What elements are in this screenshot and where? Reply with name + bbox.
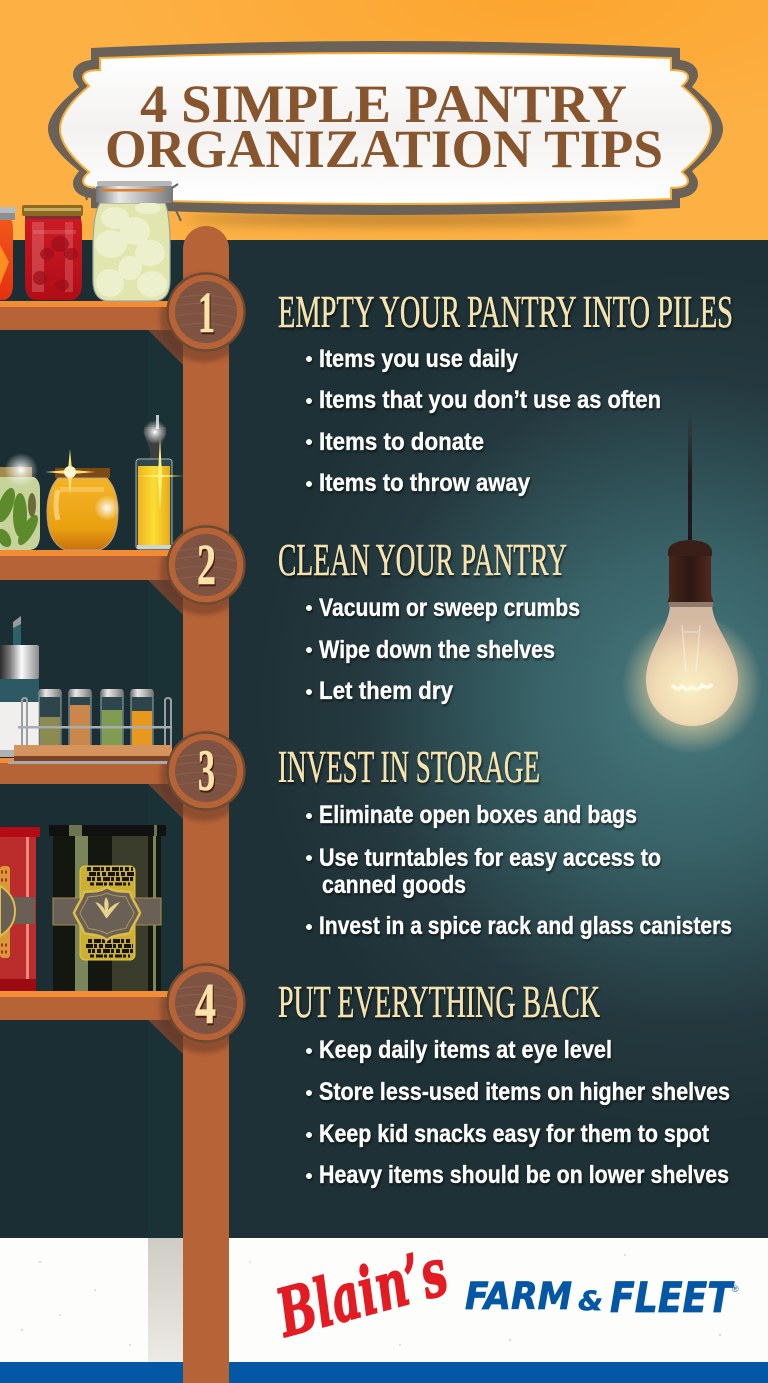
wooden post — [183, 226, 229, 1383]
back wall corner strip — [148, 240, 183, 1238]
shelf 3 — [0, 758, 183, 819]
footer speckle texture — [21, 1254, 721, 1346]
shelf 2 — [0, 550, 183, 615]
number badge 3: 3 — [198, 738, 215, 803]
tip 4 bullets: Keep daily items at eye level — [319, 1036, 612, 1064]
tin: black tea — [49, 825, 166, 991]
tip 2 bullets: Vacuum or sweep crumbs — [319, 594, 580, 622]
tip 2 — [278, 535, 580, 705]
sign outer frame — [48, 41, 723, 215]
tip 4 bullets: Keep kid snacks easy for them to spot — [319, 1120, 710, 1148]
logo script wordmark: Blain’s — [268, 1233, 455, 1353]
logo block wordmark FARM: FARM — [465, 1275, 572, 1318]
badge shadows on wood — [158, 272, 229, 1055]
tin: red tea — [0, 827, 40, 991]
spice: olive — [39, 689, 61, 749]
left pantry back wall — [0, 240, 183, 1238]
jar: honey pot — [45, 449, 120, 550]
tip 1 bullets: Items to donate — [319, 428, 484, 456]
tip 1 bullets: Items you use daily — [319, 345, 518, 373]
tip 1 bullets: Items that you don’t use as often — [319, 386, 661, 414]
shelf 4 — [0, 991, 183, 1054]
tip 4 bullets — [306, 1036, 730, 1189]
number badge 3 — [168, 732, 244, 810]
jar: red preserves — [22, 205, 83, 300]
tip 2 heading: CLEAN YOUR PANTRY — [278, 535, 567, 585]
bottle: olive oil — [136, 415, 184, 549]
number badge 1: 1 — [198, 280, 215, 345]
tip 3 — [278, 742, 732, 940]
spice rack — [8, 689, 173, 764]
number badge 2 — [168, 526, 244, 604]
sign inner panel — [60, 53, 711, 204]
tip 2 bullets: Let them dry — [319, 677, 453, 705]
tip 4 — [278, 977, 730, 1189]
title sign — [48, 41, 723, 215]
blue footer strip — [0, 1362, 768, 1383]
number badge 4: 4 — [195, 971, 216, 1036]
jar: sugar dispenser — [0, 616, 39, 757]
registered mark: ® — [732, 1284, 739, 1294]
tip 3 bullets: Use turntables for easy access to — [319, 844, 661, 872]
title text — [105, 74, 663, 179]
number badge 1 — [168, 274, 244, 350]
jar: orange preserves — [0, 207, 16, 300]
white footer band — [0, 1238, 768, 1363]
dark teal background panel — [0, 240, 768, 1238]
tip 3 bullets: Eliminate open boxes and bags — [319, 801, 637, 829]
tip 3 bullets — [306, 801, 732, 940]
jar: pickles — [0, 453, 42, 550]
light bulb — [622, 410, 762, 754]
spice: green — [101, 689, 123, 749]
tip 2 bullets: Wipe down the shelves — [319, 636, 555, 664]
logo block wordmark ampersand: & — [578, 1286, 603, 1317]
number badge 2: 2 — [197, 532, 216, 597]
spice: orange — [131, 689, 153, 749]
jar: pale onions — [86, 181, 181, 301]
tip 2 bullets — [306, 594, 580, 705]
tip 1 — [278, 287, 733, 497]
number badge 4 — [168, 964, 244, 1042]
rack rail back — [22, 698, 171, 749]
title text: ORGANIZATION TIPS — [105, 119, 663, 179]
spice: tan — [69, 689, 91, 749]
orange header background — [0, 0, 768, 240]
tip 3 heading: INVEST IN STORAGE — [278, 742, 540, 792]
footer wall shade — [148, 1238, 183, 1363]
shelf 1 — [0, 301, 183, 365]
logo block wordmark FLEET: FLEET — [610, 1273, 735, 1322]
title text: 4 SIMPLE PANTRY — [140, 74, 627, 134]
tip 1 bullets: Items to throw away — [319, 469, 530, 497]
tip 1 bullets — [306, 345, 661, 497]
title sign shadow — [185, 212, 635, 226]
tip 3 bullets: canned goods — [322, 871, 466, 899]
logo: Blain's Farm & Fleet — [268, 1233, 739, 1353]
